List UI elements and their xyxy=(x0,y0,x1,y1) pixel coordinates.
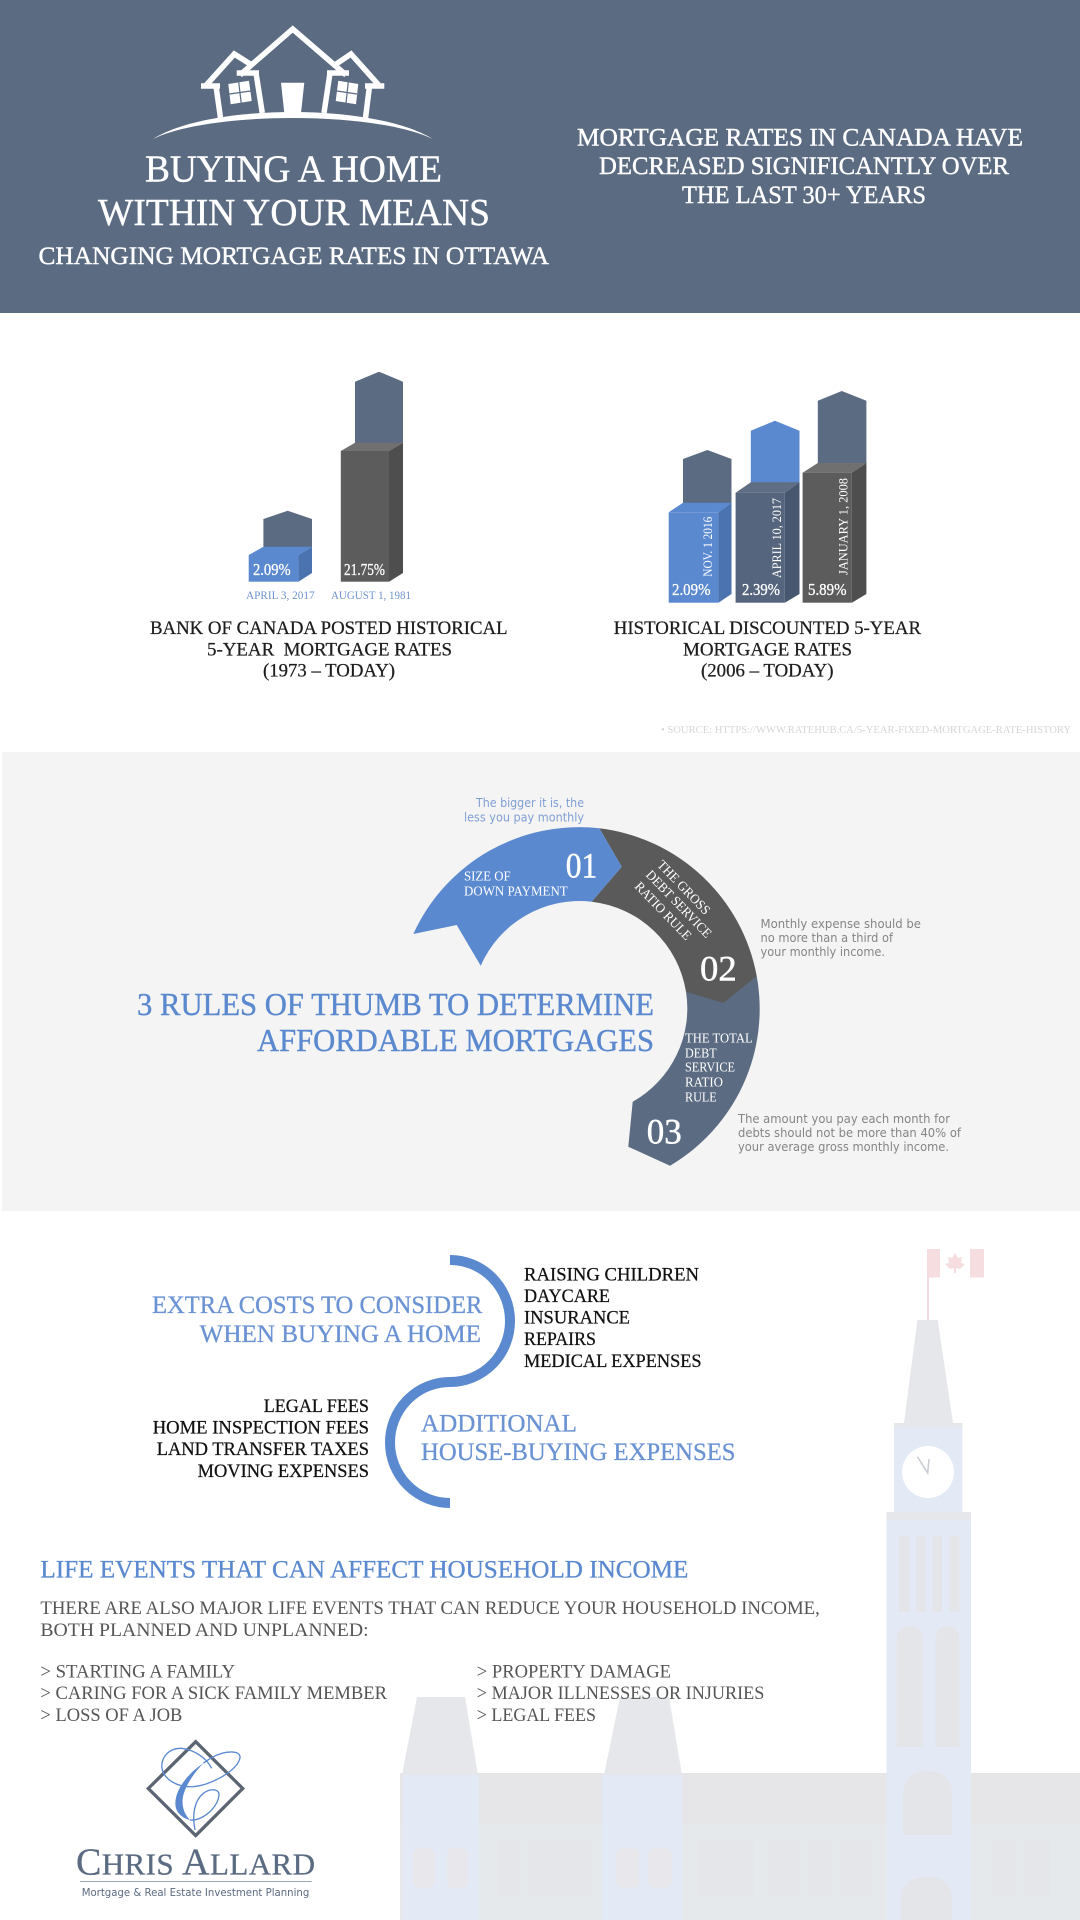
bar: January 1 2008: JANUARY 1, 2008 xyxy=(836,478,850,575)
ring segment 03: navy: THE TOTAL xyxy=(685,1031,753,1046)
list: ongoing costs: RAISING CHILDREN xyxy=(524,1265,699,1286)
chart caption xyxy=(614,618,921,682)
list: right column: > MAJOR ILLNESSES OR INJURIES xyxy=(477,1684,764,1704)
bar: April 10 2017 xyxy=(736,421,800,603)
source note: • SOURCE: HTTPS://WWW.RATEHUB.CA/5-YEAR-FIXED-MORTGAGE-RATE-HISTORY xyxy=(661,725,1071,736)
list: buying expenses xyxy=(153,1396,369,1482)
list: ongoing costs: INSURANCE xyxy=(524,1308,630,1329)
callout: rule 3: debts should not be more than 40% of xyxy=(738,1126,962,1140)
ring segment 01: blue arrow: 01 xyxy=(566,845,597,885)
date labels xyxy=(246,588,411,602)
heading xyxy=(137,986,654,1058)
bar: Nov 1 2016: 2.09% xyxy=(672,580,710,599)
list: right column: > PROPERTY DAMAGE xyxy=(477,1663,671,1683)
centre house xyxy=(237,29,349,113)
title: WITHIN YOUR MEANS xyxy=(98,192,490,234)
bar: August 1 1981 xyxy=(341,372,403,582)
list: left column xyxy=(40,1663,388,1726)
ring segment 01: blue arrow xyxy=(413,827,622,966)
bar: April 3 2017 xyxy=(249,511,312,582)
list: right column xyxy=(477,1663,764,1726)
list: left column: > CARING FOR A SICK FAMILY MEMBER xyxy=(40,1684,388,1704)
ring segment 03: navy: RATIO xyxy=(685,1075,723,1090)
list: ongoing costs: REPAIRS xyxy=(524,1329,596,1350)
clock tower xyxy=(886,1423,971,1920)
callout: rule 3 xyxy=(737,1112,962,1154)
chart caption: (2006 – TODAY) xyxy=(701,660,834,682)
bar: Nov 1 2016: NOV. 1 2016 xyxy=(701,517,715,577)
callout: rule 3: your average gross monthly income. xyxy=(738,1140,949,1154)
middle turret xyxy=(602,1697,682,1920)
ring segment 03: navy: SERVICE xyxy=(685,1060,735,1075)
callout: rule 1: The bigger it is, the xyxy=(475,796,584,810)
chart caption: 5-YEAR MORTGAGE RATES xyxy=(207,640,452,661)
bar: Nov 1 2016 xyxy=(669,450,732,603)
callout: rule 2: no more than a third of xyxy=(760,931,894,945)
intro text xyxy=(40,1599,820,1641)
headline statement xyxy=(577,123,1023,209)
list: ongoing costs: MEDICAL EXPENSES xyxy=(524,1351,702,1372)
bar: August 1 1981: 21.75% xyxy=(344,560,385,579)
icon: diamond xyxy=(148,1742,243,1836)
bar chart: historical discounted rates xyxy=(614,391,921,682)
heading: extra costs xyxy=(152,1290,482,1348)
list: buying expenses: HOME INSPECTION FEES xyxy=(153,1418,369,1439)
headline statement: THE LAST 30+ YEARS xyxy=(682,180,926,209)
list: left column: > LOSS OF A JOB xyxy=(40,1706,182,1726)
panel: extra costs xyxy=(152,1260,736,1503)
ring segment 02: gray xyxy=(592,828,757,1003)
bar: April 3 2017: 2.09% xyxy=(253,560,291,579)
heading: additional expenses xyxy=(421,1409,736,1466)
callout: rule 2 xyxy=(760,917,921,959)
heading: additional expenses: ADDITIONAL xyxy=(421,1409,577,1438)
list: right column: > LEGAL FEES xyxy=(477,1706,596,1726)
spire xyxy=(904,1320,953,1423)
chart caption: BANK OF CANADA POSTED HISTORICAL xyxy=(150,618,508,639)
callout: rule 1 xyxy=(464,796,584,825)
headline statement: DECREASED SIGNIFICANTLY OVER xyxy=(599,151,1009,180)
headline statement: MORTGAGE RATES IN CANADA HAVE xyxy=(577,123,1023,152)
logo: Chris Allard xyxy=(76,1742,315,1899)
ring segment 03: navy: 03 xyxy=(647,1111,682,1151)
ring segment 03: navy xyxy=(628,976,760,1166)
callout: rule 2: your monthly income. xyxy=(760,945,885,959)
callout: rule 3: The amount you pay each month for xyxy=(737,1112,950,1126)
header banner xyxy=(0,0,1080,313)
flag xyxy=(927,1249,984,1321)
wordmark: CHRIS ALLARD xyxy=(76,1841,315,1883)
list: buying expenses: LEGAL FEES xyxy=(264,1396,369,1417)
heading: additional expenses: HOUSE-BUYING EXPENSES xyxy=(421,1437,736,1466)
left turret xyxy=(402,1697,479,1920)
chart caption: (1973 – TODAY) xyxy=(263,660,395,682)
bar chart: Bank of Canada posted rates xyxy=(150,372,508,682)
windows xyxy=(228,81,358,104)
tagline: Mortgage & Real Estate Investment Planning xyxy=(82,1887,309,1899)
list: ongoing costs: DAYCARE xyxy=(524,1286,610,1307)
intro text: THERE ARE ALSO MAJOR LIFE EVENTS THAT CAN REDUCE YOUR HOUSEHOLD INCOME, xyxy=(40,1599,820,1619)
bar: January 1 2008: 5.89% xyxy=(808,580,846,599)
bar: January 1 2008 xyxy=(803,391,866,603)
ring segment 02: gray: 02 xyxy=(700,949,737,989)
ring segment 01: blue arrow: SIZE OF xyxy=(464,869,511,884)
intro text: BOTH PLANNED AND UNPLANNED: xyxy=(40,1621,369,1641)
panel: 3 rules of thumb xyxy=(2,752,1080,1211)
S-curve divider xyxy=(390,1260,510,1503)
list: ongoing costs xyxy=(524,1265,702,1372)
heading: 3 RULES OF THUMB TO DETERMINE xyxy=(137,986,654,1022)
bar: April 10 2017: 2.39% xyxy=(742,580,780,599)
date labels: APRIL 3, 2017 xyxy=(246,588,315,602)
icon: script C xyxy=(162,1748,240,1830)
bar: April 10 2017: APRIL 10, 2017 xyxy=(770,498,784,578)
ring segment 02: gray: THE GROSS xyxy=(654,857,713,918)
title: CHANGING MORTGAGE RATES IN OTTAWA xyxy=(38,243,549,270)
heading: extra costs: WHEN BUYING A HOME xyxy=(200,1319,481,1348)
date labels: AUGUST 1, 1981 xyxy=(331,588,411,602)
callout: rule 1: less you pay monthly xyxy=(464,811,584,825)
ring segment 01: blue arrow: DOWN PAYMENT xyxy=(464,883,568,898)
heading: LIFE EVENTS THAT CAN AFFECT HOUSEHOLD INCOME xyxy=(40,1557,688,1584)
ring segment 03: navy: DEBT xyxy=(685,1045,717,1060)
heading: AFFORDABLE MORTGAGES xyxy=(257,1022,654,1058)
ring segment 02: gray: RATIO RULE xyxy=(632,879,695,943)
ring segment 03: navy: RULE xyxy=(685,1090,717,1105)
ring segment 02: gray: DEBT SERVICE xyxy=(643,867,715,941)
title: BUYING A HOME xyxy=(145,149,442,191)
icon: house logo xyxy=(153,29,433,139)
chart caption: HISTORICAL DISCOUNTED 5-YEAR xyxy=(614,618,921,639)
heading: extra costs: EXTRA COSTS TO CONSIDER xyxy=(152,1290,482,1319)
list: left column: > STARTING A FAMILY xyxy=(40,1663,235,1683)
list: buying expenses: LAND TRANSFER TAXES xyxy=(157,1439,369,1460)
main body xyxy=(400,1773,1080,1920)
side houses xyxy=(201,54,384,118)
list: buying expenses: MOVING EXPENSES xyxy=(198,1461,369,1482)
callout: rule 2: Monthly expense should be xyxy=(760,917,921,931)
title xyxy=(38,149,549,270)
chart caption xyxy=(150,618,508,682)
panel: life events xyxy=(40,1557,820,1726)
background: parliament building xyxy=(400,1249,1080,1920)
chart caption: MORTGAGE RATES xyxy=(683,640,852,661)
